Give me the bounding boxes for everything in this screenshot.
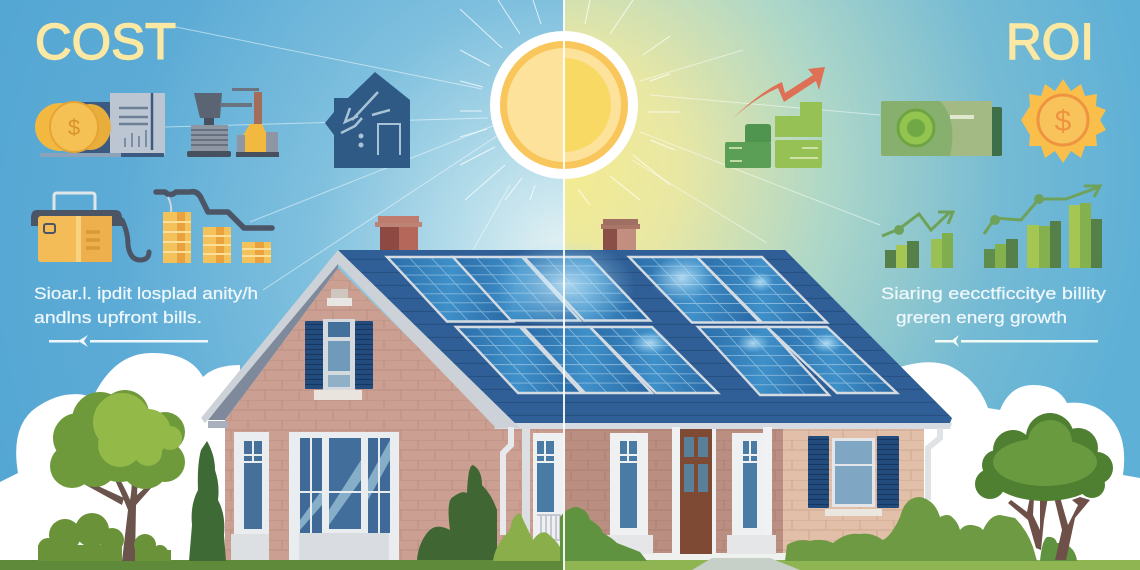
cloud: right xyxy=(900,362,1140,561)
text block: cost caption: andlns upfront bills. xyxy=(34,308,202,327)
shrub: house left dark xyxy=(417,465,497,560)
arrow: ROI divider xyxy=(935,335,1098,347)
left lower window xyxy=(231,432,269,560)
fascia xyxy=(494,423,952,429)
heading: ROI: ROI xyxy=(1006,13,1094,70)
icon: house damage blueprint xyxy=(325,72,410,168)
wall: brick, porch right xyxy=(563,427,784,554)
shrub: right hedge xyxy=(785,497,1037,561)
downpipe xyxy=(503,427,511,535)
icon: coin stacks with pipe xyxy=(156,192,272,263)
center divider line xyxy=(563,0,565,570)
house xyxy=(201,216,952,561)
icon: banknote xyxy=(881,101,1002,156)
chart: large growth bars xyxy=(984,186,1102,268)
icon: sun with dollar sign xyxy=(1021,79,1106,163)
ground xyxy=(0,558,1140,570)
attic vent xyxy=(327,289,352,306)
gable trim xyxy=(201,250,520,428)
window left of door xyxy=(602,433,653,554)
roof xyxy=(338,250,952,423)
solar panels: left array xyxy=(387,257,718,393)
shrub: porch right xyxy=(560,507,647,561)
text block: ROI caption xyxy=(881,284,1107,327)
chimney: right xyxy=(601,219,640,251)
icon: sun with dollar sign: $ xyxy=(1055,105,1072,138)
upper window with shutters xyxy=(305,319,373,400)
icon: toolbox with hose xyxy=(31,193,149,262)
text block: ROI caption: greren energ growth xyxy=(896,308,1067,327)
right window with shutters xyxy=(808,436,899,516)
sun xyxy=(490,31,638,179)
wall: brick, left and porch xyxy=(225,268,563,561)
gutter xyxy=(928,428,940,500)
cloud: left xyxy=(0,353,240,561)
shrub: right small xyxy=(1040,537,1077,561)
sun rays xyxy=(165,0,880,300)
shrub: house left light xyxy=(493,513,564,561)
tree: left xyxy=(50,390,185,561)
wall: brick, light right xyxy=(783,427,924,554)
chimney: left xyxy=(375,216,422,251)
arrow: cost divider xyxy=(49,335,208,347)
text block: cost caption xyxy=(34,284,258,327)
icon: rising arrow with green cards xyxy=(725,67,825,168)
chart: small growth bars xyxy=(882,212,953,268)
background: ROI side xyxy=(564,0,1140,570)
icon: coins and invoice on laptop xyxy=(35,93,165,157)
porch floor xyxy=(563,553,933,561)
shrub: left of tree xyxy=(38,513,171,561)
french door xyxy=(289,432,399,560)
sunlight glints on panels xyxy=(495,240,843,355)
solar panels: right array xyxy=(629,257,897,395)
window right of door xyxy=(727,427,776,554)
tree: cypress xyxy=(189,441,226,561)
tree: right xyxy=(975,413,1113,560)
background: cost side xyxy=(0,0,564,570)
text block: ROI caption: Siaring eecctficcitye billity xyxy=(881,284,1107,303)
icon: coins and invoice on laptop: $ xyxy=(68,115,80,140)
front door xyxy=(672,427,716,554)
porch column and window xyxy=(522,429,563,560)
icon: installation machine xyxy=(187,88,279,157)
text block: cost caption: Sioar.l. ipdit losplad anity/h xyxy=(34,284,258,303)
heading: COST: COST xyxy=(35,13,176,70)
